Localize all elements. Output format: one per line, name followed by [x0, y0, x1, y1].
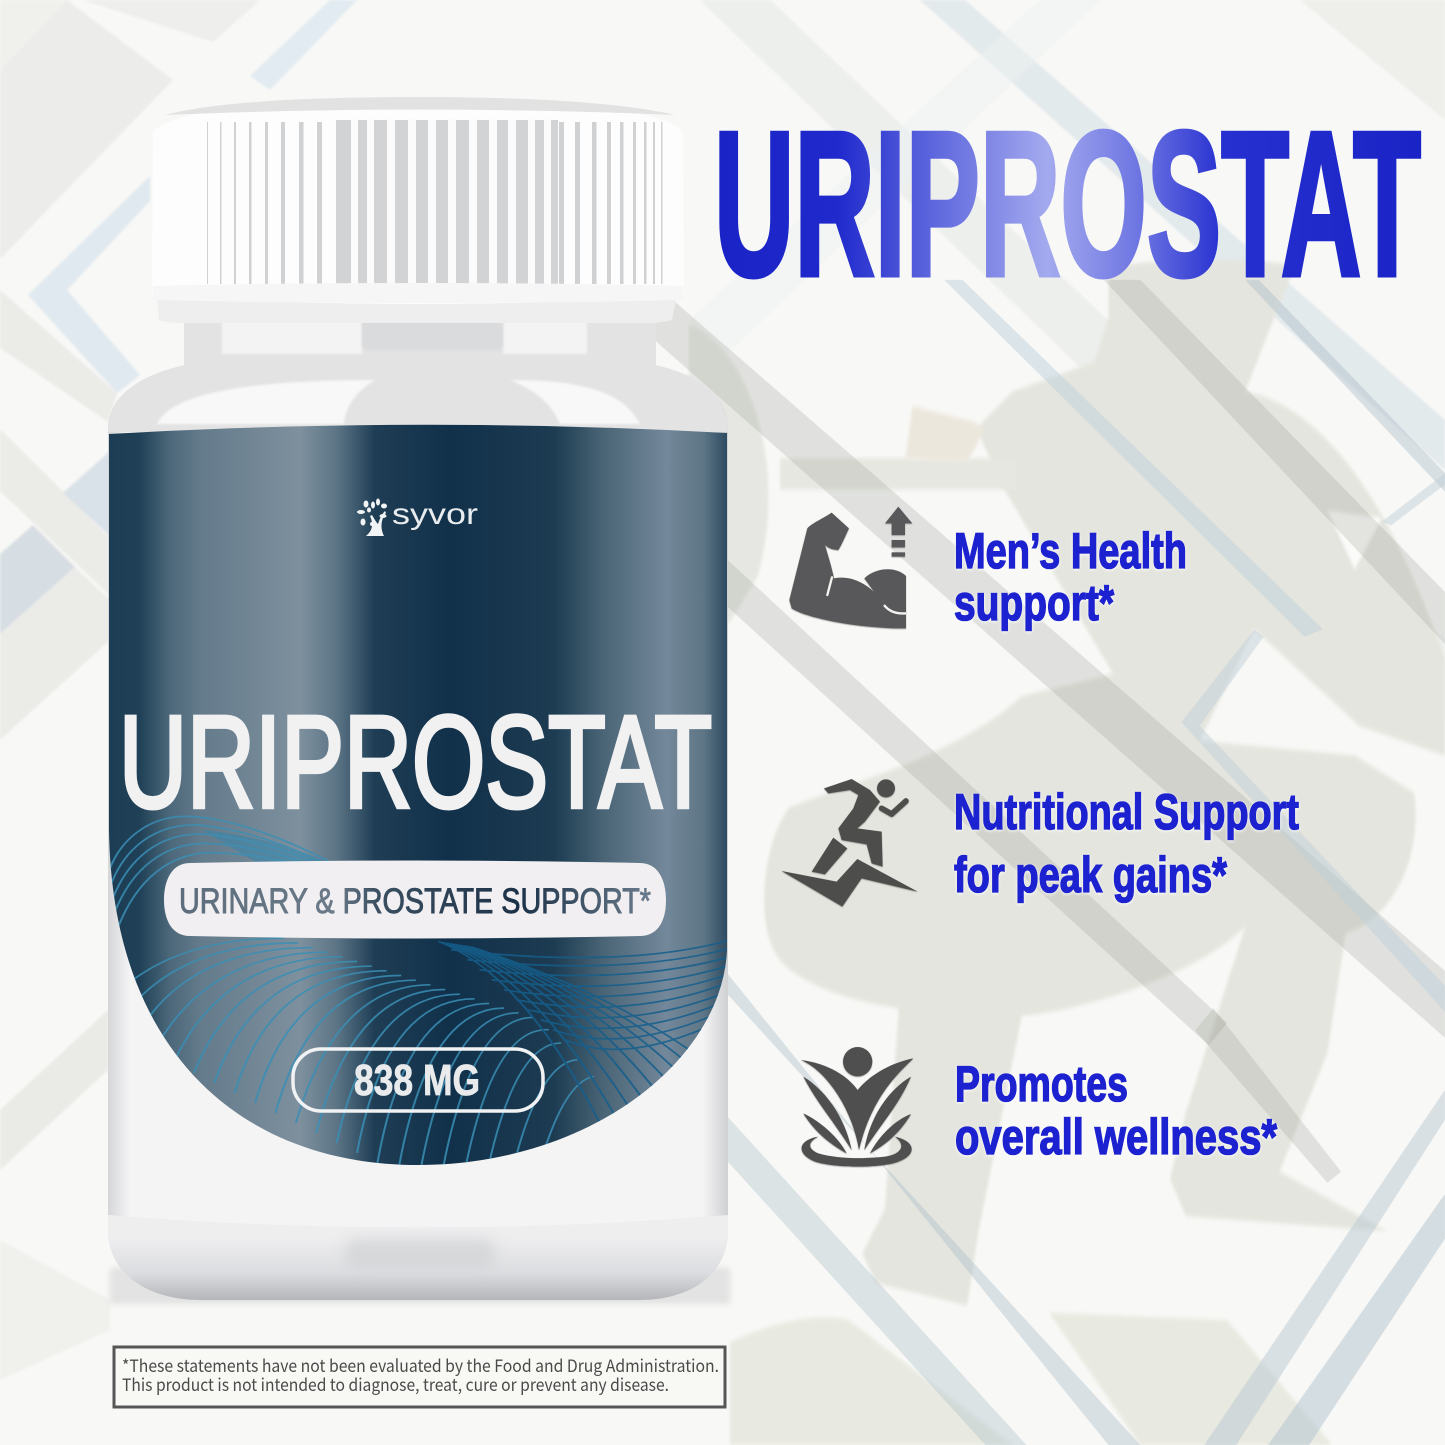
brand logo [357, 498, 478, 536]
label wave pattern [110, 816, 727, 1165]
benefit text: overall wellness* [955, 1109, 1277, 1165]
disclaimer box: This product is not intended to diagnose, treat, cure or prevent any disease. [122, 1371, 669, 1396]
product label [92, 425, 741, 1213]
product bottle [92, 97, 741, 1304]
benefit text [954, 523, 1187, 631]
benefit text: support* [954, 575, 1114, 631]
athlete body [764, 260, 1445, 1305]
benefit 3: overall wellness [801, 1047, 1277, 1167]
bottle shadow [110, 1268, 730, 1304]
benefit text [955, 1056, 1277, 1165]
dosage pill [293, 1049, 543, 1111]
barbell [780, 458, 1017, 490]
benefit 2: nutritional support [782, 779, 1299, 907]
bottle neck [184, 310, 656, 368]
bottle cap [152, 97, 684, 304]
benefit text: Nutritional Support [954, 784, 1299, 840]
hand [906, 406, 985, 462]
icon: tree [357, 498, 387, 536]
product name on label: URIPROSTAT [119, 688, 712, 835]
brand logo: syvor [392, 498, 478, 531]
weight plate [689, 325, 768, 622]
benefit text: Men’s Health [954, 523, 1187, 579]
bottle shoulder [108, 365, 728, 432]
benefit text: for peak gains* [954, 847, 1227, 903]
benefit 1: men's health [789, 507, 1187, 631]
icon: wellness figure [801, 1047, 913, 1167]
benefit text: Promotes [955, 1056, 1128, 1112]
bottle base [108, 1215, 728, 1300]
icon: flexed arm with up arrow [789, 507, 912, 628]
disclaimer box [114, 1347, 725, 1407]
icon: runner [782, 779, 918, 907]
floor [730, 1313, 1332, 1445]
overlay bands [639, 270, 1445, 1445]
background athlete silhouette [639, 260, 1445, 1445]
dosage pill: 838 MG [354, 1056, 480, 1105]
tagline pill [164, 860, 666, 938]
disclaimer box: *These statements have not been evaluated by the Food and Drug Administration. [122, 1352, 719, 1377]
tagline pill: URINARY & PROSTATE SUPPORT* [179, 882, 651, 921]
bottle body [108, 365, 728, 1300]
cap ribs [207, 120, 662, 287]
benefit text [954, 784, 1299, 903]
